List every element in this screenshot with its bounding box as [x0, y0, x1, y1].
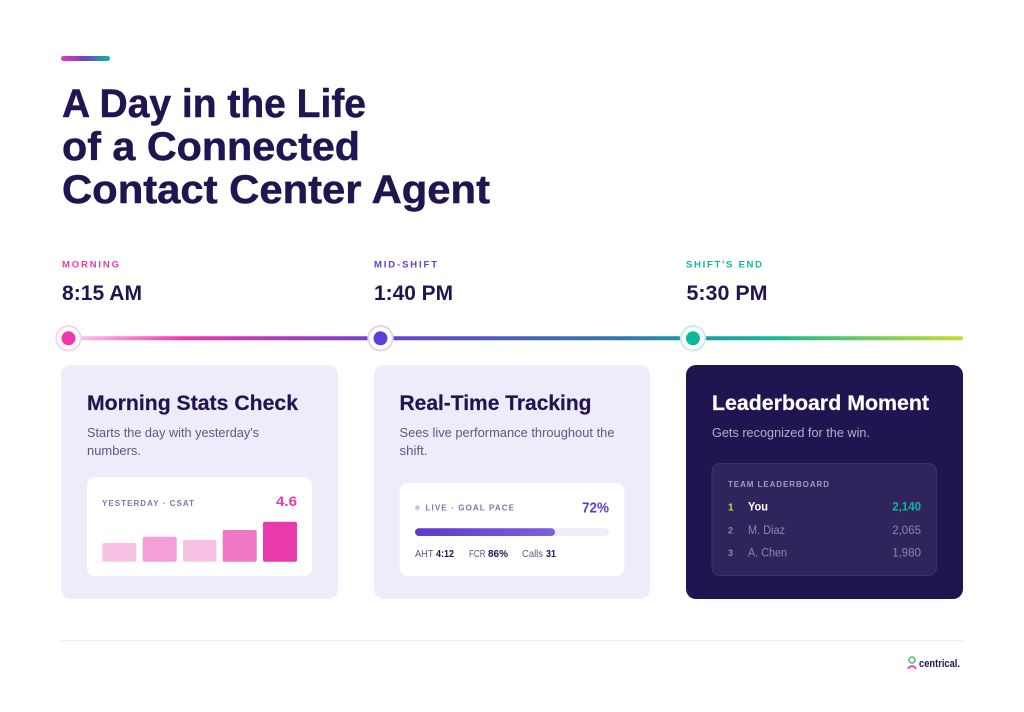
- progress card: 4:12: [436, 549, 454, 560]
- label: shift's end: [686, 260, 768, 305]
- row 1: 2,140: [892, 502, 921, 514]
- description: [400, 425, 614, 458]
- timeline: [56, 326, 963, 350]
- progress card: 72%: [582, 501, 609, 517]
- panel: morning stats check: [61, 365, 338, 599]
- title: of a Connected: [62, 125, 360, 169]
- progress card: LIVE · GOAL PACE: [426, 504, 515, 513]
- label: mid-shift: MID-SHIFT: [374, 260, 437, 270]
- marker: morning: [56, 326, 81, 350]
- label: morning: [62, 260, 142, 305]
- progress card: FCR: [469, 549, 486, 560]
- leaderboard card: TEAM LEADERBOARD: [728, 480, 829, 489]
- description: [87, 425, 259, 458]
- panel: leaderboard moment: [686, 365, 963, 599]
- description: Sees live performance throughout the: [400, 425, 614, 440]
- logo: centrical: centrical.: [919, 658, 960, 670]
- marker: shift's end: [681, 326, 705, 350]
- leaderboard card: [712, 464, 936, 576]
- title: Contact Center Agent: [62, 168, 490, 212]
- row 3: 3: [728, 548, 733, 558]
- heading: Leaderboard Moment: [712, 392, 929, 415]
- timeline line: [68, 336, 963, 340]
- heading: Real-Time Tracking: [400, 392, 592, 415]
- description: shift.: [400, 443, 428, 458]
- label: shift's end: SHIFT'S END: [686, 260, 762, 270]
- bar chart card: 4.6: [276, 493, 297, 509]
- progress card: Calls: [522, 549, 543, 560]
- label: mid-shift: [374, 260, 453, 305]
- label: mid-shift: 1:40 PM: [374, 282, 453, 305]
- row 2: 2,065: [892, 525, 921, 537]
- logo: centrical: [908, 657, 960, 670]
- bar chart card: YESTERDAY · CSAT: [102, 499, 194, 508]
- timeline labels: [62, 260, 768, 305]
- marker: mid-shift: [368, 326, 393, 350]
- title: [62, 82, 490, 212]
- panel: real-time tracking: [374, 365, 650, 599]
- row 3: A. Chen: [748, 548, 787, 560]
- title: A Day in the Life: [62, 82, 366, 126]
- progress card: [400, 483, 624, 576]
- row 2: [728, 525, 921, 537]
- description: numbers.: [87, 443, 141, 458]
- row 1: You: [748, 502, 768, 514]
- row 1: [728, 502, 921, 514]
- icon: person: [908, 657, 916, 669]
- progress card: 31: [546, 549, 556, 560]
- bar chart card: [87, 477, 312, 576]
- description: Starts the day with yesterday's: [87, 425, 259, 440]
- progress card: AHT: [415, 549, 434, 560]
- row 2: M. Diaz: [748, 525, 785, 537]
- label: morning: 8:15 AM: [62, 282, 142, 305]
- row 2: 2: [728, 526, 733, 536]
- label: shift's end: 5:30 PM: [686, 282, 768, 305]
- row 3: [728, 548, 921, 560]
- progress card: 86%: [488, 549, 508, 560]
- description: Gets recognized for the win.: [712, 425, 870, 440]
- row 1: 1: [728, 502, 734, 514]
- row 3: 1,980: [892, 548, 921, 560]
- heading: Morning Stats Check: [87, 392, 298, 415]
- accent bar: [61, 56, 110, 61]
- label: morning: MORNING: [62, 260, 119, 270]
